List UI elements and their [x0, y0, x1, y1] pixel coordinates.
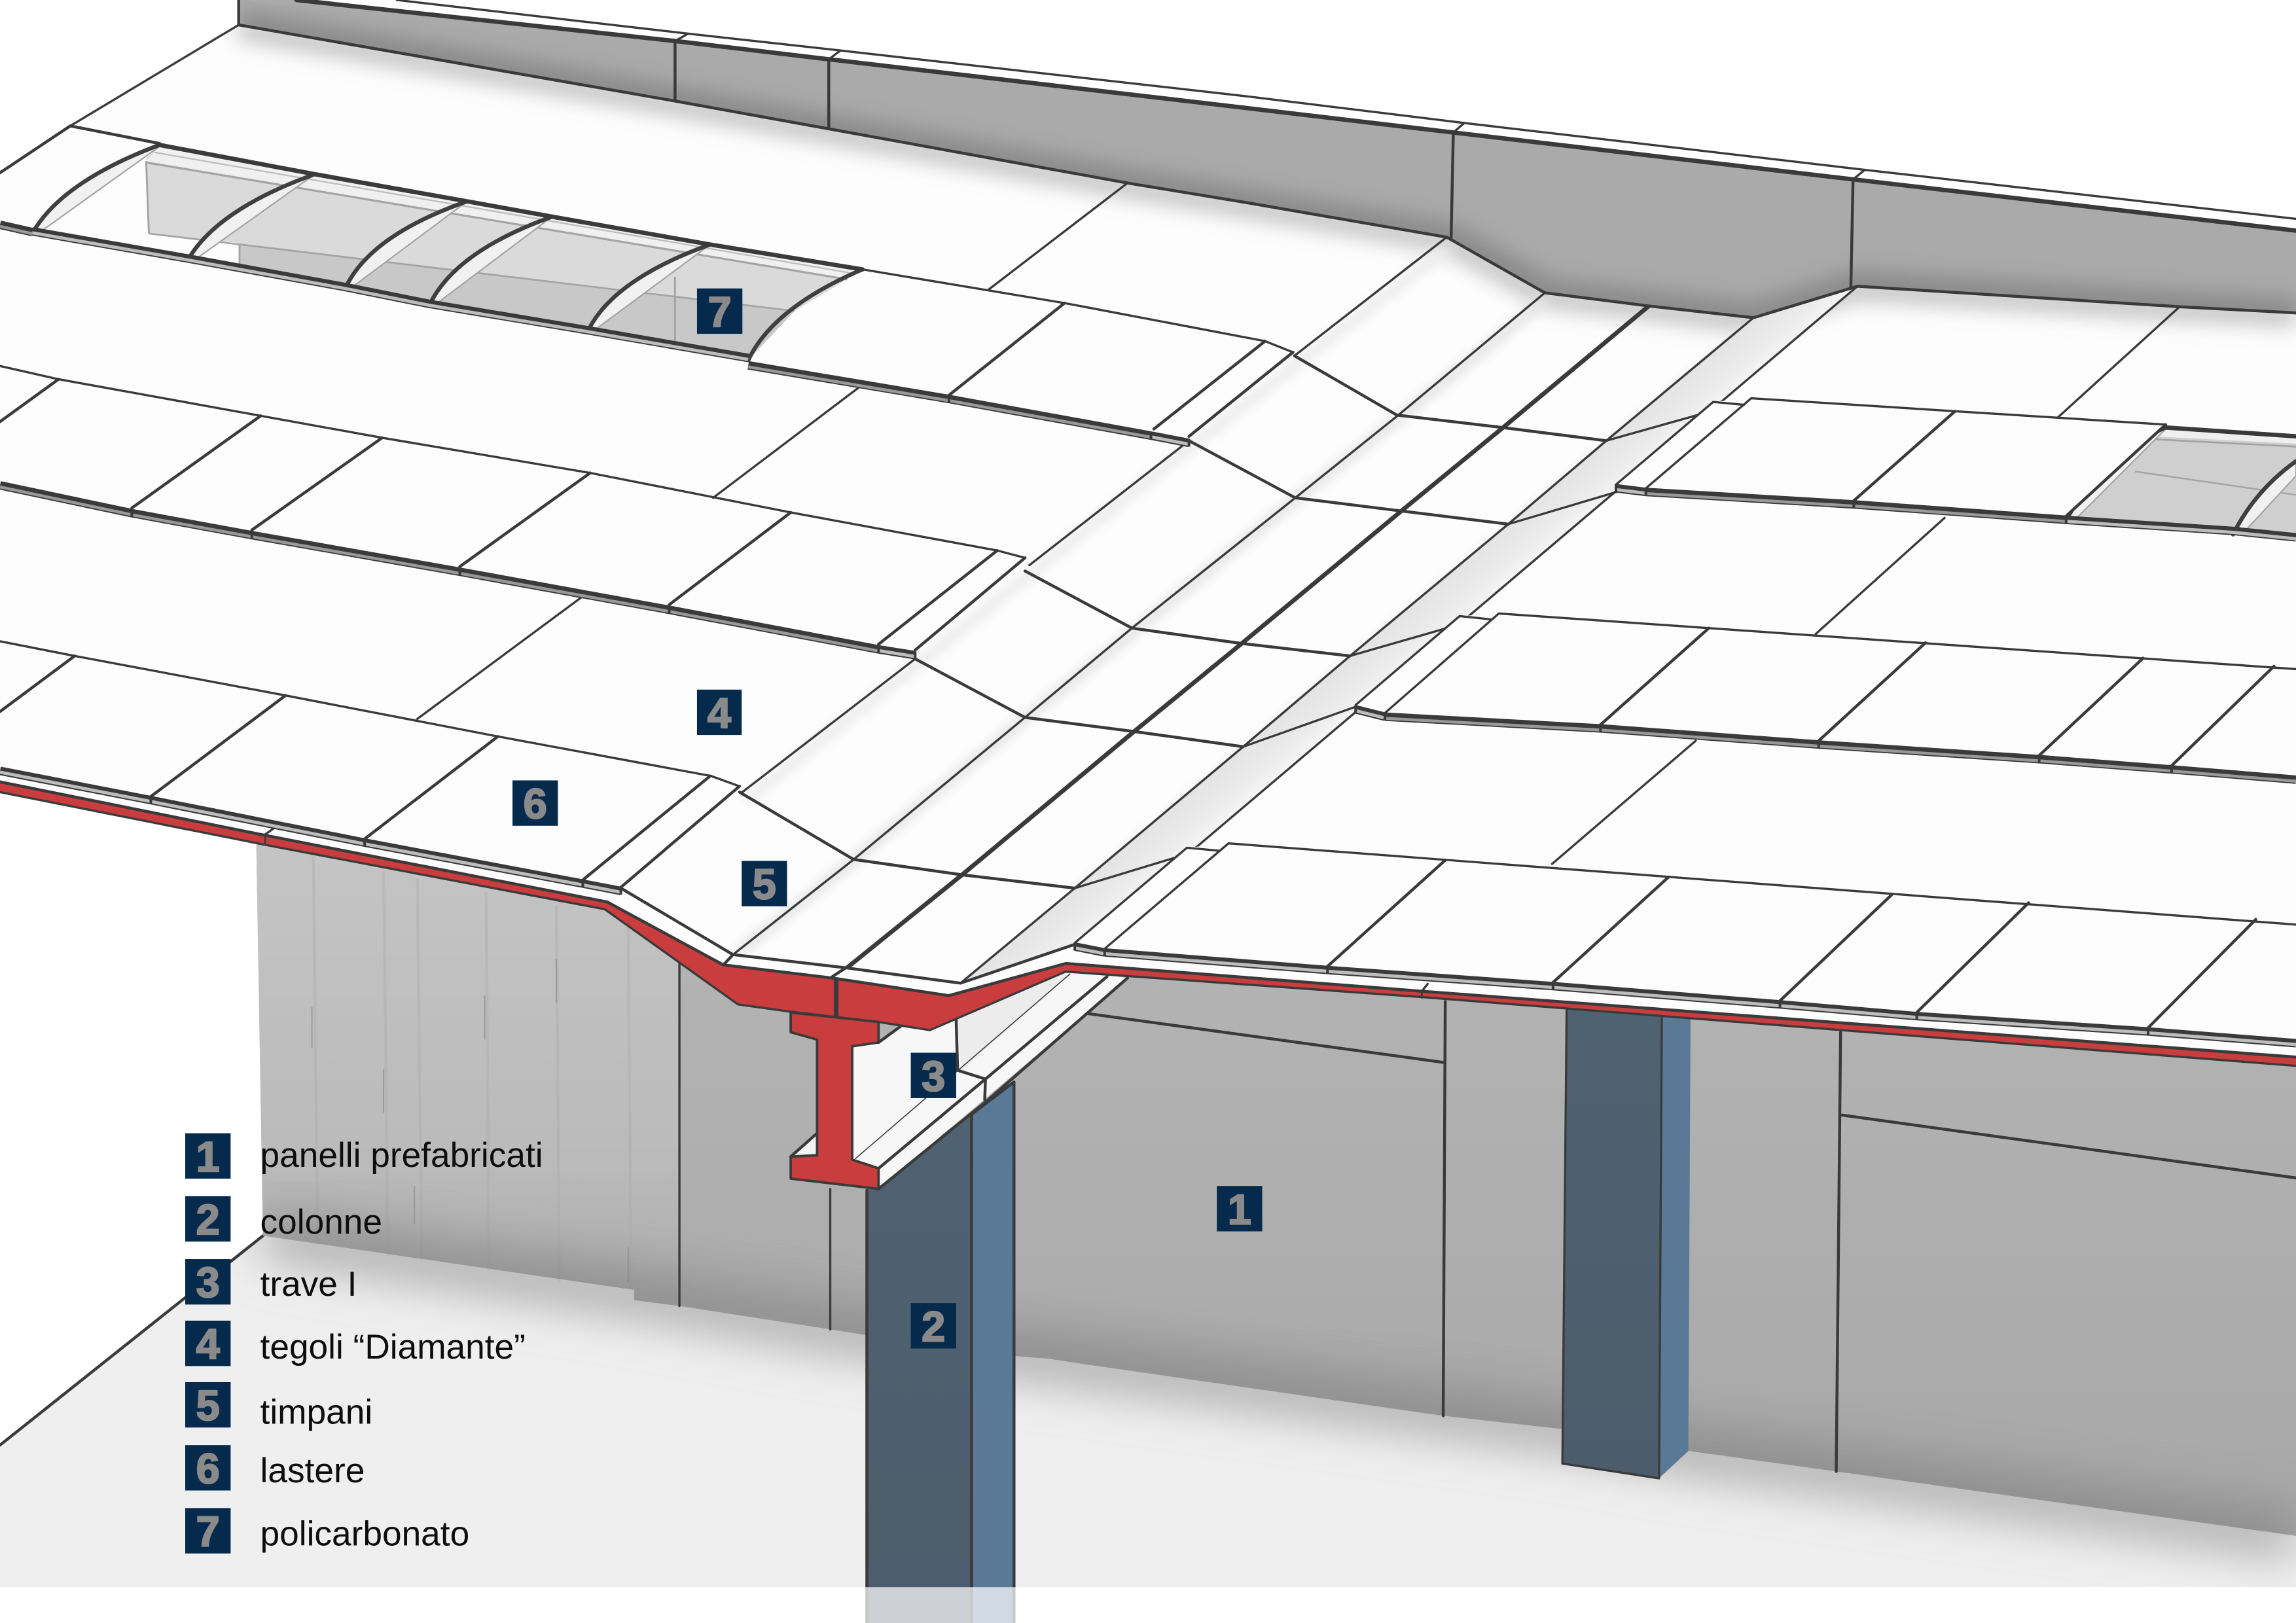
lastere drip edges — [0, 224, 2296, 1044]
legend item 4: tegoli “Diamante” — [260, 1328, 526, 1366]
red I beam section — [791, 1012, 878, 1189]
parapet back wall — [239, 0, 2296, 328]
legend item 3: 3 — [196, 1258, 220, 1306]
label 5: 5 — [753, 861, 776, 908]
gutter channel between timpani and right roof — [961, 286, 1857, 983]
tegoli and timpani lines — [70, 25, 2179, 983]
legend item 7: policarbonato — [260, 1514, 469, 1553]
legend item 3 — [185, 1258, 357, 1306]
red cross-section of tegoli — [0, 782, 2296, 1066]
legend item 2: 2 — [196, 1196, 220, 1243]
main column in front — [867, 1082, 1014, 1623]
label 1: 1 — [1228, 1185, 1251, 1233]
lastere top-left stub — [0, 126, 160, 230]
label 5 — [742, 861, 787, 908]
legend item 2: colonne — [260, 1203, 382, 1241]
polycarbonate skylight left — [32, 145, 863, 360]
label 7: 7 — [708, 288, 732, 336]
I beam extruded body — [791, 969, 1128, 1189]
legend item 7 — [185, 1508, 469, 1556]
prefabricated wall panels — [257, 842, 2296, 1542]
legend item 5: 5 — [196, 1382, 220, 1429]
label 1 — [1217, 1185, 1263, 1233]
label 4: 4 — [708, 689, 731, 737]
label 2 — [911, 1302, 956, 1350]
lastere left rows — [0, 270, 1293, 887]
lastere right rows — [1075, 399, 2296, 1039]
legend item 1: 1 — [196, 1133, 220, 1181]
legend item 4: 4 — [196, 1320, 220, 1368]
second column — [1562, 995, 1691, 1478]
label 6: 6 — [524, 780, 547, 828]
legend item 1 — [185, 1133, 543, 1181]
legend item 5 — [185, 1382, 372, 1432]
label 3: 3 — [922, 1052, 945, 1100]
bottom fade strip — [0, 1587, 2296, 1623]
label 3 — [911, 1052, 956, 1100]
legend item 6 — [185, 1444, 365, 1492]
label 6 — [512, 780, 558, 828]
legend item 7: 7 — [196, 1508, 220, 1556]
legend item 6: 6 — [196, 1444, 220, 1492]
legend item 4 — [185, 1320, 526, 1368]
legend item 1: panelli prefabricati — [260, 1136, 543, 1175]
legend — [185, 1133, 543, 1556]
label 4 — [697, 689, 742, 737]
roof surface — [228, 26, 2296, 982]
legend item 6: lastere — [260, 1452, 365, 1490]
legend item 3: trave I — [260, 1265, 357, 1304]
floor — [0, 1236, 2296, 1587]
label 2: 2 — [922, 1302, 945, 1350]
legend item 5: timpani — [260, 1393, 372, 1432]
label 7 — [697, 288, 742, 336]
eave edge band — [0, 773, 2296, 1057]
legend item 2 — [185, 1196, 382, 1243]
polycarbonate skylight right — [2065, 427, 2296, 541]
